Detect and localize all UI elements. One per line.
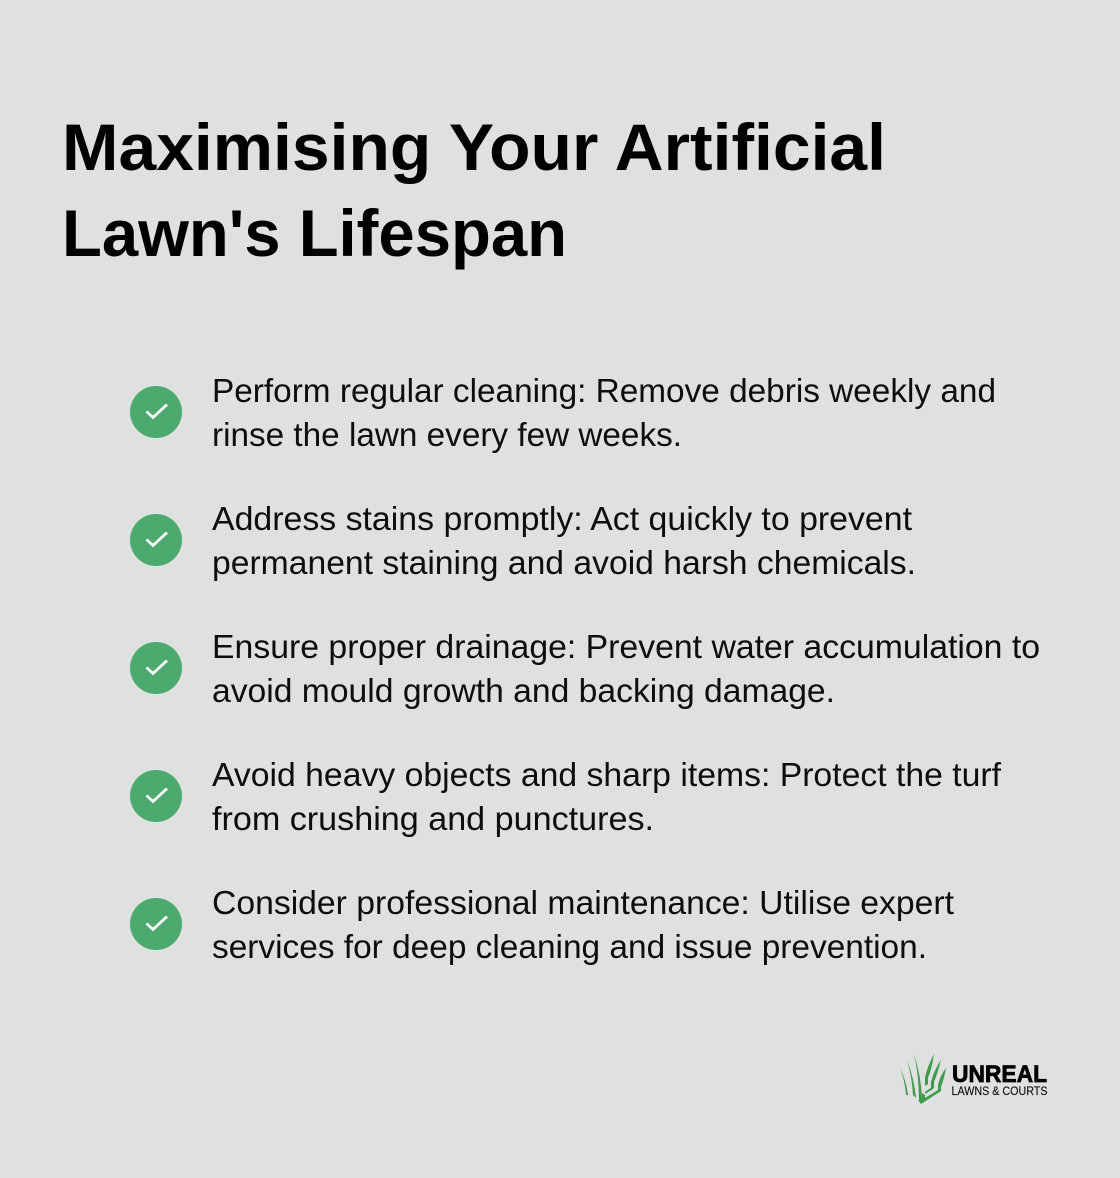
icon: green check circle [130,642,182,694]
icon: green check circle [130,898,182,950]
item 4: heavy objects [130,756,1002,837]
text: stains: Address stains promptly: Act quickly to prevent [212,500,912,537]
text: drainage [212,628,1040,709]
text: drainage: avoid mould growth and backing damage. [212,672,835,709]
text: stains: permanent staining and avoid harsh chemicals. [212,544,916,581]
text: heavy objects: from crushing and punctures. [212,800,654,837]
text: drainage: Ensure proper drainage: Prevent water accumulation to [212,628,1040,665]
icon: green check circle [130,386,182,438]
title: Lawn's Lifespan [62,196,567,270]
text: professional maintenance: Consider professional maintenance: Utilise expert [212,884,954,921]
logo wordmark: UNREAL [952,1061,1047,1088]
text: regular cleaning: Perform regular cleaning: Remove debris weekly and [212,372,996,409]
logo tagline: LAWNS & COURTS [952,1086,1048,1098]
checklist [130,372,1040,965]
item 1: regular cleaning [130,372,996,453]
icon: grass blades [900,1054,946,1104]
text: professional maintenance: services for deep cleaning and issue prevention. [212,928,927,965]
icon: green check circle [130,770,182,822]
text: regular cleaning: rinse the lawn every few weeks. [212,416,682,453]
text: regular cleaning [212,372,996,453]
text: heavy objects: Avoid heavy objects and sharp items: Protect the turf [212,756,1002,793]
item 2: stains [130,500,916,581]
text: professional maintenance [212,884,954,965]
icon: green check circle [130,514,182,566]
logo: Unreal Lawns & Courts [900,1054,1048,1104]
title [62,110,886,270]
item 5: professional maintenance [130,884,954,965]
title: Maximising Your Artificial [62,110,886,184]
text: stains [212,500,916,581]
text: heavy objects [212,756,1002,837]
item 3: drainage [130,628,1040,709]
